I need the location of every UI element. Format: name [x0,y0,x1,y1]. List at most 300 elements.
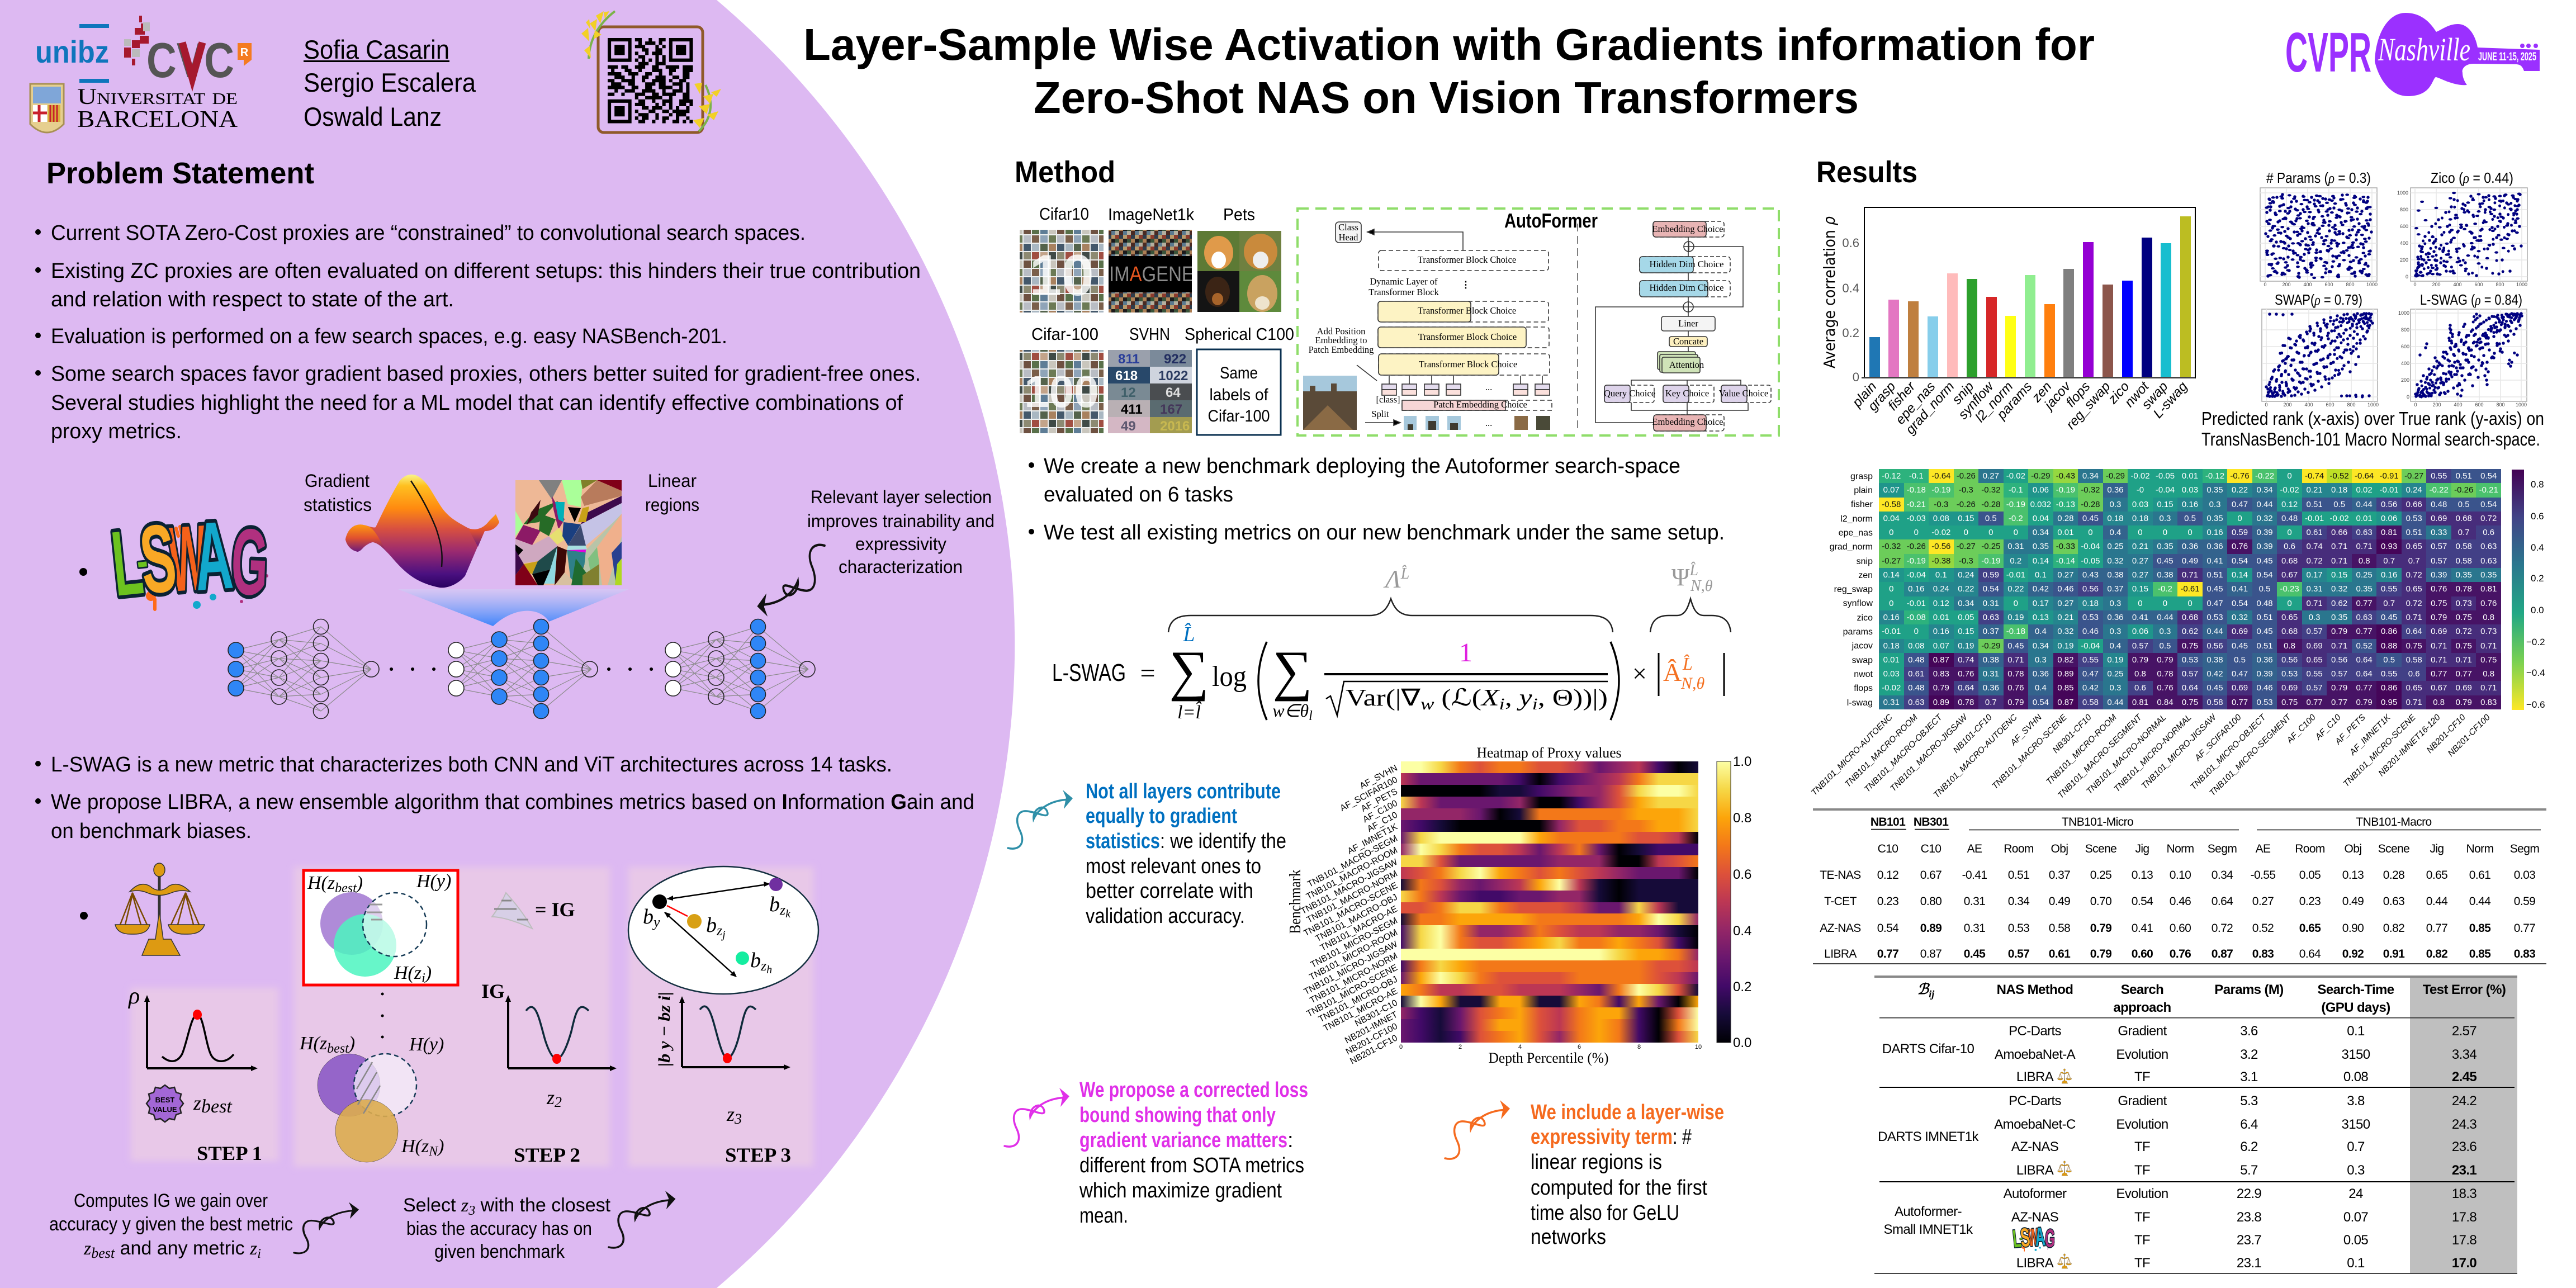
chart: scatter SWAP: 600 [2326,402,2334,408]
venn diagram: second: H(z [401,1136,429,1157]
chart: metric correlation heatmap: 0.8 [2483,613,2494,622]
chart: metric correlation heatmap: 0.63 [1908,698,1924,707]
formula: L-SWAG: = [1140,659,1156,688]
authors [304,35,476,131]
chart: heatmap of proxy values labels: Depth Percentile (%) [1488,1050,1609,1066]
table: NAS comparison: TF [2134,1233,2150,1248]
table: NAS comparison [1874,976,2517,1274]
table: Spearman correlations: 0.25 [2090,869,2111,882]
image: SVHN digits: 1022 [1158,368,1188,383]
table: Spearman correlations: 0.65 [2299,922,2321,935]
chart: metric correlation heatmap: 0.38 [1983,655,1999,665]
chart: heatmap of proxy values labels: AF_C100 [1361,798,1399,825]
title [803,20,2095,122]
chart: metric correlation heatmap: -0.19 [1981,556,2000,566]
chart: scatter SWAP: 800 [2347,402,2356,408]
chart: metric correlation heatmap: 0.36 [2107,613,2124,622]
image: SVHN digits: 811 [1118,352,1140,367]
chart labels: correlation heatmap: 0.0 [2531,605,2544,615]
chart: metric correlation heatmap: 0.83 [2480,698,2497,707]
diagram labels: Transformer Block [1368,287,1439,297]
table: Spearman correlations: 0.60 [2170,922,2191,935]
chart: metric correlation heatmap: 0.76 [1958,669,1974,679]
table: NAS comparison: Search [2121,982,2163,997]
table: Spearman correlations: 0.05 [2299,869,2321,882]
chart: metric correlation heatmap: 0.36 [2182,542,2198,551]
chart: metric correlation heatmap: 0.66 [2331,528,2347,537]
table: Spearman correlations: LIBRA [1824,948,1857,960]
chart: metric correlation heatmap: 0.79 [2456,698,2472,707]
chart: metric correlation heatmap: 0.15 [1958,514,1974,523]
venn diagram: highlighted: best [335,881,357,896]
chart: metric correlation heatmap: 0.59 [1983,570,1999,580]
image: SVHN digits [1108,350,1192,434]
chart: heatmap of proxy values labels: TNB101_MACRO-SEGM [1306,834,1399,889]
chart: metric correlation heatmap: 0.77 [2356,599,2373,608]
table: Spearman correlations: AE [2256,842,2271,855]
chart: metric correlation heatmap: -0.58 [1882,500,1901,509]
right labels: Liner [1678,318,1698,329]
table: Spearman correlations: TNB101-Micro [2062,816,2133,828]
chart: metric correlation heatmap: 0.45 [2256,556,2273,566]
image: SVHN digits: 49 [1121,419,1136,434]
table: NAS comparison: ij [1929,988,1935,1000]
table: Spearman correlations: 0.79 [2090,948,2111,960]
chart: metric correlation heatmap: 0 [1988,528,1993,537]
formula: L-SWAG: , [1505,685,1519,711]
chart: metric correlation heatmap: 0.87 [2057,698,2073,707]
text block: corrected loss bound: gradient variance matters [1079,1129,1287,1152]
chart: scatter zico [2397,169,2527,287]
diagram labels: Class [1338,222,1358,233]
chart: metric correlation heatmap: 0.71 [2480,641,2497,651]
table: NAS comparison: 0.05 [2343,1233,2368,1248]
box: same labels of Cifar-100: labels of [1210,386,1268,404]
chart: metric correlation heatmap: 0.53 [2281,669,2298,679]
chart: metric correlation heatmap: 0.64 [2356,655,2373,665]
chart: metric correlation heatmap: 0.48 [1908,655,1924,665]
chart: metric correlation heatmap: 0.57 [2306,627,2323,636]
table: NAS comparison: 3.8 [2347,1093,2365,1109]
chart: metric correlation heatmap: 0.1 [2035,570,2047,580]
diagram labels: Transformer Block Choice [1418,305,1516,316]
chart labels: correlation heatmap: snip [1857,557,1873,566]
chart: metric correlation heatmap: 0.77 [2356,683,2373,693]
chart: scatter params: 800 [2346,282,2355,287]
diagram: bias distance circle: b [769,893,780,916]
table: Spearman correlations: 0.41 [2132,922,2153,935]
chart labels: correlation heatmap: TNB101_MICRO-SCENE [2342,712,2418,789]
title: Zero-Shot NAS on Vision Transformers [1034,73,1859,122]
chart: scatter zico: 600 [2400,224,2408,229]
chart: step 2 curve: 2 [555,1094,562,1110]
diagram labels: Embedding to [1315,335,1367,345]
chart: heatmap of proxy values labels: 0.4 [1733,924,1751,939]
caption: scatter plots [2201,408,2544,449]
chart: average correlation bars: synflow [1955,378,1997,422]
chart: metric correlation heatmap: -0.43 [2056,471,2075,481]
chart: metric correlation heatmap: 0.37 [1983,627,1999,636]
chart: metric correlation heatmap: 0.19 [2057,641,2073,651]
chart: metric correlation heatmap: 0.57 [2306,683,2323,693]
diagram labels: Transformer Block Choice [1418,254,1516,265]
table: Spearman correlations: 0.83 [2252,948,2274,960]
chart: heatmap of proxy values [1401,761,1698,1043]
diagram: bias distance circle [628,866,818,994]
chart: metric correlation heatmap: -0.56 [1931,542,1950,551]
chart: metric correlation heatmap: -0.12 [1882,471,1901,481]
chart labels: correlation heatmap: flops [1854,684,1873,693]
chart: metric correlation heatmap: -0.21 [1907,500,1926,509]
caption: step 3 explanation [403,1195,611,1262]
chart: metric correlation heatmap: -0.03 [1907,514,1926,523]
chart: metric correlation heatmap: 0.69 [2456,683,2472,693]
diagram labels: Head [1339,232,1358,243]
chart: metric correlation heatmap: 0.74 [2306,542,2323,551]
table: Spearman correlations: T-CET [1824,895,1857,908]
caption: step 1 explanation: accuracy y given the best metric [49,1214,293,1235]
chart: average correlation bars: 0.4 [1842,281,1859,295]
panel: venn and step 2 [294,867,610,1167]
table: NAS comparison: Evolution [2116,1047,2168,1062]
chart: metric correlation heatmap: 0.63 [1983,613,1999,622]
table: NAS comparison: Small IMNET1k [1884,1222,1973,1237]
chart: metric correlation heatmap: -0.64 [2355,471,2374,481]
chart: metric correlation heatmap: 0.17 [2306,570,2323,580]
chart: metric correlation heatmap: 0.71 [2431,655,2447,665]
chart labels: correlation heatmap: 0.8 [2531,479,2544,490]
chart: average correlation bars: zen [2029,379,2054,406]
chart: metric correlation heatmap: -0.19 [1907,556,1926,566]
chart: average correlation bars: fisher [1885,378,1919,414]
annotation: gray labels and braces [1168,562,1731,632]
chart: metric correlation heatmap: 0.57 [2182,669,2198,679]
table: Spearman correlations: 0.57 [2008,948,2029,960]
venn diagram: highlighted: ) [424,963,432,983]
chart: metric correlation heatmap: 0.24 [2406,485,2422,495]
chart: heatmap of proxy values labels: 0.6 [1733,867,1751,882]
chart: metric correlation heatmap: 0.51 [2406,528,2422,537]
table: Spearman correlations: 0.85 [2469,948,2491,960]
table: Spearman correlations: 0.12 [1877,869,1898,882]
chart: metric correlation heatmap: 0.65 [2281,613,2298,622]
chart: metric correlation heatmap: 0.12 [2281,500,2298,509]
image: Cifar10 mosaic [1020,230,1104,312]
chart: heatmap of proxy values labels: 10 [1695,1044,1702,1050]
chart: metric correlation heatmap: 0.77 [2331,698,2347,707]
chart: scatter L-SWAG: 0 [2414,402,2417,408]
chart: metric correlation heatmap: 0.48 [2256,599,2273,608]
chart labels: correlation heatmap: TNB101_MICRO-ROOM [2044,713,2119,787]
chart: metric correlation heatmap: 0.72 [2456,627,2472,636]
table: NAS comparison: Evolution [2116,1186,2168,1201]
chart: metric correlation heatmap: -0.04 [2081,542,2100,551]
chart: average correlation bars: 0.2 [1842,326,1859,340]
chart: metric correlation heatmap: -0.05 [2081,556,2100,566]
chart: metric correlation heatmap: 0.67 [2281,570,2298,580]
chart: metric correlation heatmap: 0.76 [2007,683,2024,693]
chart: metric correlation heatmap: 0.81 [2132,698,2148,707]
chart: metric correlation heatmap: 0 [2163,599,2167,608]
chart: metric correlation heatmap: 0.62 [2331,599,2347,608]
heading: Problem Statement: Problem Statement [46,157,314,190]
formula: L-SWAG: l [1309,709,1313,723]
logo: CVPR Nashville: JUNE 11-15, 2025 [2478,50,2536,63]
table: Spearman correlations: 0.77 [2514,922,2535,935]
table: NAS comparison: 2.57 [2452,1024,2476,1039]
chart: heatmap of proxy values labels: 0.0 [1733,1035,1751,1050]
bullet dot for LIBRA [80,912,88,920]
chart: metric correlation heatmap: 0.45 [2206,584,2223,594]
icon: QR code with wheat [581,11,721,132]
table: NAS comparison: DARTS Cifar-10 [1882,1041,1974,1057]
table: Spearman correlations: C10 [1878,842,1898,855]
logo: CVC [124,16,252,88]
table: Spearman correlations: 0.58 [2049,922,2070,935]
chart: metric correlation heatmap: -0.19 [1931,485,1950,495]
chart: metric correlation heatmap: -0.21 [2479,485,2498,495]
table: NAS comparison: 3.34 [2452,1047,2476,1062]
chart: metric correlation heatmap: 0.16 [1883,613,1900,622]
text block: expressivity term: : # [1673,1125,1692,1149]
chart: scatter zico: 1000 [2397,190,2408,196]
chart: metric correlation heatmap: 0.34 [1958,599,1974,608]
icon: best value badge: VALUE [153,1105,177,1114]
chart: metric correlation heatmap: 0.3 [2110,627,2121,636]
table: NAS comparison: LIBRA [2016,1256,2054,1271]
chart: metric correlation heatmap: 0.8 [2134,669,2146,679]
image: SVHN digits: 64 [1166,385,1181,400]
callout: relevant layer selection: expressivity [855,534,946,554]
chart: average correlation bars: flops [2063,379,2093,410]
diagram: bias distance circle: j [721,929,726,941]
table: Spearman correlations: 0.64 [2212,895,2233,908]
venn diagram: highlighted: ) [356,873,363,893]
chart labels: correlation heatmap: epe_nas [1839,528,1873,538]
chart: metric correlation heatmap: -0.64 [1931,471,1950,481]
chart: metric correlation heatmap: 0.41 [2132,613,2148,622]
chart: metric correlation heatmap: 0 [1914,528,1919,537]
table: Spearman correlations: Norm [2466,842,2494,855]
chart: metric correlation heatmap: 0.71 [2007,655,2024,665]
table: Spearman correlations: 0.80 [1920,895,1942,908]
chart labels: correlation heatmap: NB101-CF10 [1952,713,1994,755]
table: Spearman correlations: 0.83 [2514,948,2535,960]
chart: metric correlation heatmap: 0.31 [1983,669,1999,679]
chart: scatter L-SWAG: 600 [2475,402,2484,408]
chart: metric correlation heatmap: 0.18 [2331,485,2347,495]
chart: metric correlation heatmap: 0.55 [2082,655,2099,665]
chart: metric correlation heatmap: 0.57 [2132,641,2148,651]
chart: heatmap of proxy values labels: TNB101_MICRO-OBJ [1317,975,1399,1024]
chart: metric correlation heatmap: 0.28 [2057,514,2073,523]
chart: metric correlation heatmap: 0.82 [2057,655,2073,665]
authors: Sergio Escalera [304,68,476,97]
chart: average correlation bars: 0.6 [1842,236,1859,250]
text block: problem statement bullets: proxy metrics. [51,420,182,443]
table: Spearman correlations: C10 [1921,842,1941,855]
chart: metric correlation heatmap: -0.28 [2081,500,2100,509]
right labels: Embedding Choice [1652,224,1723,234]
chart: metric correlation heatmap: -0.2 [2009,514,2023,523]
chart: metric correlation heatmap: 0.53 [2206,613,2223,622]
chart: metric correlation heatmap: 0.35 [2157,542,2174,551]
chart: metric correlation heatmap: 0.5 [2259,584,2270,594]
chart: metric correlation heatmap: 0 [2187,528,2193,537]
chart: step 1 curve: ρ [127,983,140,1009]
image: patches [1404,416,1550,430]
heading: Results: Results [1816,155,1917,189]
chart: metric correlation heatmap: -0.19 [2056,485,2075,495]
chart: 3D loss surface [345,475,499,588]
chart: metric correlation heatmap: 0.64 [2406,627,2422,636]
chart: metric correlation heatmap: 0.64 [1958,683,1974,693]
table: NAS comparison: ℬ [1917,981,1929,997]
table: Spearman correlations: 0.65 [2426,869,2447,882]
venn diagram: highlighted: H(z [394,963,422,983]
chart: metric correlation heatmap: 0.36 [2256,655,2273,665]
chart: metric correlation heatmap: 0.38 [2157,570,2174,580]
chart: metric correlation heatmap: 0.45 [2381,613,2397,622]
chart: metric correlation heatmap: 0.69 [2232,627,2248,636]
chart: average correlation bars: params [1993,379,2035,423]
text block: not all layers: Not all layers contribute [1086,780,1281,803]
chart: metric correlation heatmap: 0.12 [1933,599,1949,608]
text block: not all layers: most relevant ones to [1086,855,1261,878]
chart: metric correlation heatmap: 0.58 [2206,698,2223,707]
chart: metric correlation heatmap: 0.35 [2480,570,2497,580]
table: Spearman correlations: 0.70 [2090,895,2111,908]
chart: average correlation bars: reg_swap [2063,379,2113,432]
text block: method bullets: evaluated on 6 tasks [1044,483,1233,506]
table: Spearman correlations: 0.59 [2514,895,2535,908]
logo: unibz [35,24,109,83]
chart: metric correlation heatmap: 0.77 [2306,698,2323,707]
table: NAS comparison: 2.45 [2452,1069,2476,1085]
chart: metric correlation heatmap: 0.54 [2256,570,2273,580]
chart: metric correlation heatmap: 0.18 [2107,514,2124,523]
chart: scatter zico: 800 [2400,207,2408,212]
chart: metric correlation heatmap [1879,469,2501,709]
chart: metric correlation heatmap: 0.57 [2331,669,2347,679]
right labels: Value Choice [1719,388,1768,399]
chart: metric correlation heatmap: 0.3 [2209,500,2220,509]
chart: metric correlation heatmap: -0.02 [2330,514,2349,523]
table: NAS comparison: Test Error (%) [2423,982,2506,997]
chart: metric correlation heatmap: 0.36 [1983,683,1999,693]
chart: metric correlation heatmap: 0.71 [2456,655,2472,665]
chart: metric correlation heatmap: -0.3 [1934,500,1948,509]
chart: metric correlation heatmap: 0.51 [2256,641,2273,651]
dataset labels row 1: Cifar10 [1039,204,1089,224]
separator [1577,224,1578,430]
table: NAS comparison: 6.4 [2240,1117,2258,1132]
table: NAS comparison: LIBRA [2016,1069,2054,1085]
chart: metric correlation heatmap: -0.2 [2158,584,2172,594]
text block: corrected loss bound: We propose a corrected loss [1079,1078,1308,1102]
table: Spearman correlations: 0.44 [2469,895,2491,908]
chart: metric correlation heatmap: 0.51 [2306,500,2323,509]
chart: metric correlation heatmap: 0.79 [2157,655,2174,665]
chart: heatmap of proxy values labels: TNB101_MACRO-OBJ [1314,893,1399,944]
chart: step 1 curve [127,983,258,1071]
chart: metric correlation heatmap: 0.22 [2232,485,2248,495]
chart: metric correlation heatmap: 0.79 [2007,698,2024,707]
callout: relevant layer selection: characterization [839,557,963,577]
chart: metric correlation heatmap: -0.01 [2006,570,2025,580]
label: z best and step 1: z [193,1092,201,1114]
diagram labels: Patch Embedding Choice [1433,399,1527,410]
chart: metric correlation heatmap: 0.54 [2232,556,2248,566]
chart: heatmap of proxy values labels: TNB101_MACRO-AE [1319,905,1399,953]
formula: L-SWAG: w [1420,695,1434,713]
arrow: black squiggle 2 [609,1191,675,1248]
chart: metric correlation heatmap: 0.45 [2082,514,2099,523]
logo: CVC: CVC [146,32,234,88]
text block: not all layers: statistics [1086,830,1160,853]
table: Spearman correlations: 0.54 [2132,895,2153,908]
chart: average correlation bars: grasp [1865,379,1898,414]
chart: metric correlation heatmap: -0.22 [2430,485,2449,495]
chart: metric correlation heatmap: 0.79 [2356,698,2373,707]
chart: metric correlation heatmap: 0.39 [2431,570,2447,580]
chart: scatter L-SWAG: L-SWAG (ρ = 0.84) [2420,291,2522,308]
chart: metric correlation heatmap: 0.74 [1958,655,1974,665]
text block: expressivity term: linear regions is [1531,1150,1662,1174]
chart: metric correlation heatmap: 0.35 [2456,570,2472,580]
chart: step 2 curve: z [547,1086,555,1109]
chart: metric correlation heatmap: 0.55 [2381,669,2397,679]
chart: metric correlation heatmap: -0.29 [2031,471,2050,481]
chart: metric correlation heatmap: 0.81 [2381,528,2397,537]
dataset labels row 1: ImageNet1k [1108,205,1194,224]
table: Spearman correlations: 0.52 [2252,922,2274,935]
chart: scatter SWAP: SWAP(ρ = 0.79) [2275,291,2362,308]
chart: metric correlation heatmap: -0.61 [2180,584,2200,594]
chart: metric correlation heatmap: 0.5 [1985,514,1997,523]
label: gradient statistics: statistics [304,495,372,515]
chart: scatter L-SWAG: 200 [2432,402,2441,408]
chart: metric correlation heatmap: 0.58 [2082,698,2099,707]
chart: metric correlation heatmap: 0.45 [2232,641,2248,651]
right labels: Attention [1669,359,1704,370]
icon: best value badge [146,1085,183,1122]
chart: heatmap of proxy values labels: NB201-IMNET [1343,1010,1399,1045]
chart: metric correlation heatmap: -0.04 [1907,570,1926,580]
chart: metric correlation heatmap: 0.16 [1933,627,1949,636]
chart: metric correlation heatmap: 0.02 [2356,485,2373,495]
chart: metric correlation heatmap: 0.57 [2431,542,2447,551]
chart: metric correlation heatmap: 0.77 [2456,669,2472,679]
left: transformer stack [1336,222,1552,425]
chart: metric correlation heatmap: 0.16 [2182,500,2198,509]
chart: metric correlation heatmap: 0.79 [2132,655,2148,665]
chart: metric correlation heatmap: 0.31 [2007,542,2024,551]
chart: metric correlation heatmap: 0.04 [2033,514,2049,523]
chart labels: correlation heatmap: TNB101_MICRO-AUTOENC [1810,712,1895,798]
chart labels: correlation heatmap: −0.4 [2526,667,2545,678]
table: NAS comparison: 24 [2348,1186,2363,1201]
text block: problem statement bullets: Some search spaces favor gradient based proxies, others better suited for gradient-free ones. [51,362,921,386]
chart: metric correlation heatmap: 0 [1914,627,1919,636]
chart: metric correlation heatmap: 0.5 [2184,514,2196,523]
chart: step 2 curve [481,980,617,1166]
chart: metric correlation heatmap: 0.01 [1883,655,1900,665]
chart: metric correlation heatmap: 0.44 [2356,500,2373,509]
table: Spearman correlations: 0.60 [2132,948,2153,960]
label: gradient statistics: Gradient [305,471,370,491]
chart: metric correlation heatmap: 0.6 [2483,528,2494,537]
